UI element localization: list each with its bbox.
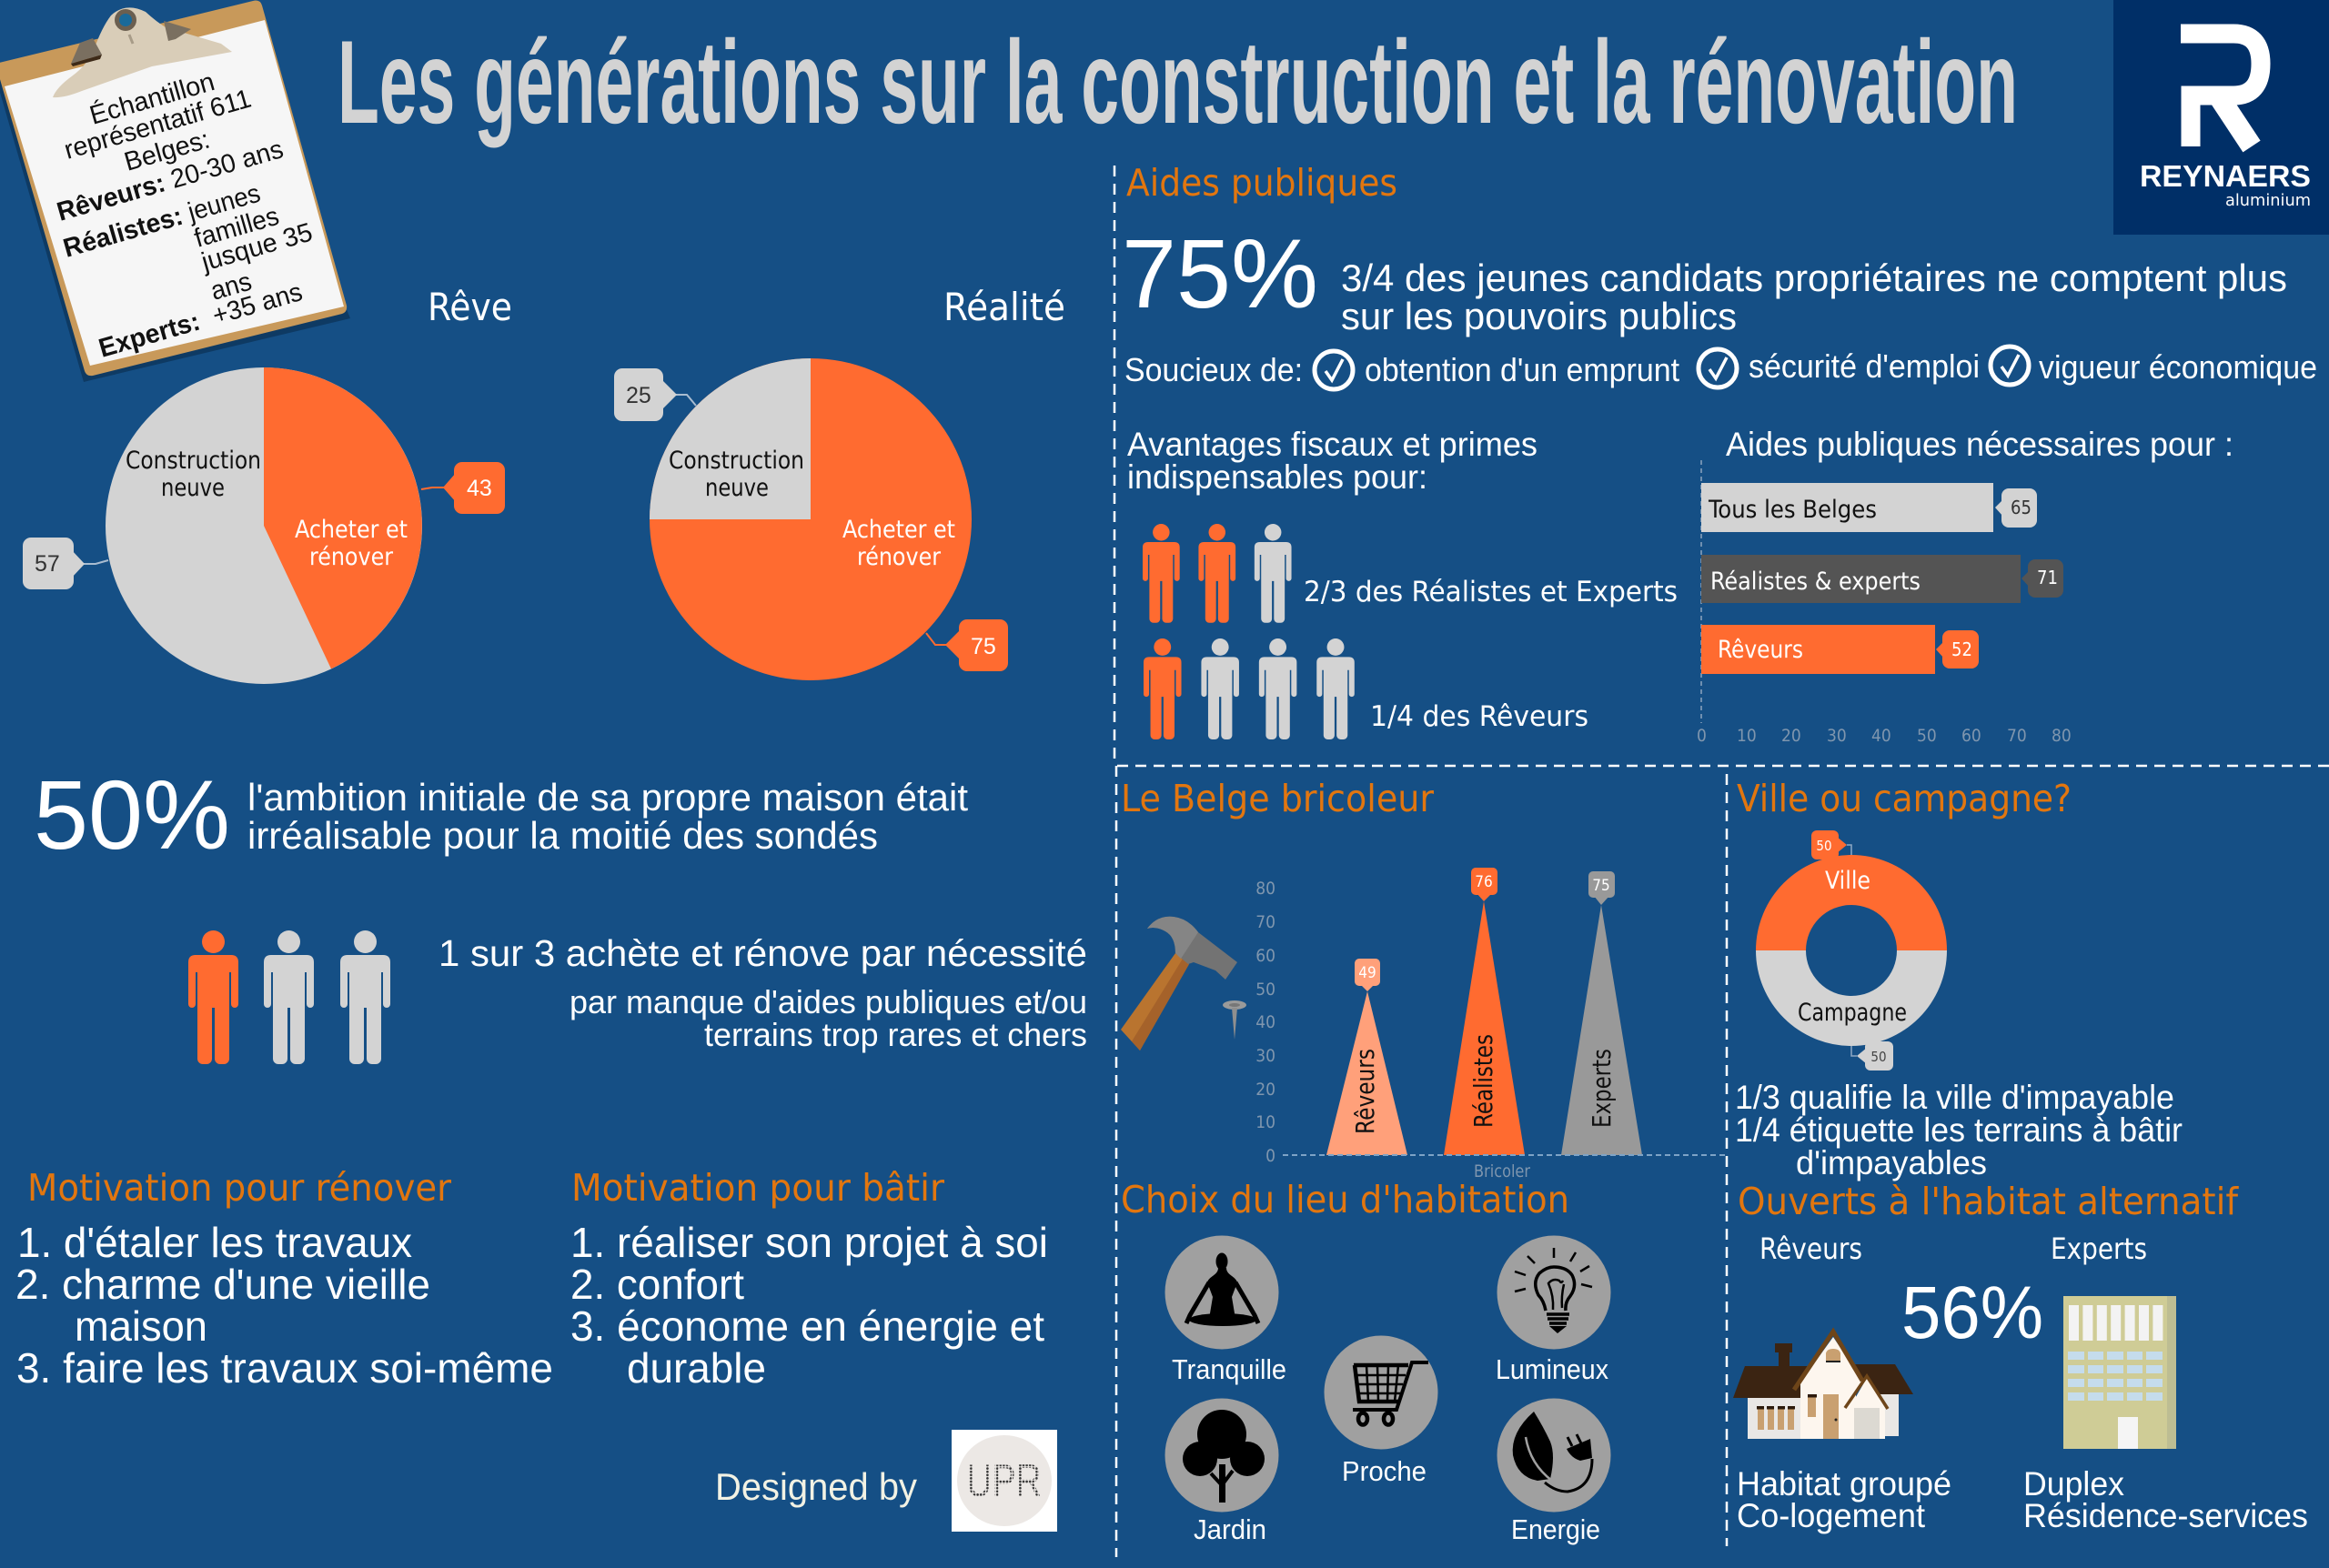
panel: Rêve pie chart: Construction (126, 447, 261, 475)
icon: Jardin (1164, 1399, 1279, 1545)
panel: Réalité pie chart: rénover (857, 543, 941, 571)
icon: Proche (1325, 1335, 1437, 1487)
icon: Tranquille (1164, 1235, 1286, 1385)
panel: motivation pour bâtir: 1. réaliser son projet à soi (570, 1219, 1048, 1266)
triangle chart: bricoler: 76 (1475, 873, 1493, 891)
panel: Réalité pie chart: Construction (669, 447, 804, 475)
logo: Reynaers aluminium: REYNAERS (2140, 159, 2311, 193)
50% statistic: l'ambition initiale de sa propre maison était (247, 776, 968, 819)
triangle chart: bricoler: 80 (1255, 879, 1275, 899)
heading: Aides publiques (1126, 161, 1397, 205)
triangle chart: bricoler: 40 (1255, 1012, 1275, 1032)
bar chart: aides publiques nécessaires: 71 (2037, 567, 2058, 588)
icon: house (1733, 1332, 1913, 1439)
panel: Réalité pie chart (614, 285, 1065, 680)
panel: Réalité pie chart: neuve (705, 474, 769, 502)
panel: Rêve pie chart: 43 (467, 476, 492, 501)
avantages fiscaux pictograms: Avantages fiscaux et primes (1127, 426, 1538, 463)
donut chart: Ville (1825, 867, 1870, 895)
ville text (1735, 1079, 2183, 1181)
bar chart: aides publiques nécessaires: 80 (2052, 726, 2072, 746)
logo: Reynaers aluminium: aluminium (2225, 191, 2311, 210)
icon: Lumineux (1496, 1235, 1610, 1385)
avantages fiscaux pictograms (1127, 426, 1678, 739)
triangle chart: bricoler: 49 (1358, 964, 1376, 982)
bar chart: aides publiques nécessaires: 0 (1697, 726, 1707, 746)
bar chart: aides publiques nécessaires: 52 (1951, 638, 1972, 660)
triangle chart: bricoler: 30 (1255, 1046, 1275, 1066)
panel: Rêve pie chart: Acheter et (295, 516, 408, 544)
panel: le Belge bricoleur: Le Belge bricoleur (1121, 777, 1435, 820)
1 sur 3 pictogram: 1 sur 3 achète et rénove par nécessité (439, 932, 1087, 974)
icon: apartment building (2063, 1296, 2176, 1449)
triangle chart: bricoler: 70 (1255, 912, 1275, 932)
panel: motivation pour bâtir: 3. économe en énergie et (570, 1302, 1044, 1350)
clipboard: sample description: Échantillon (86, 66, 217, 131)
heading: Rêve: Rêve (428, 285, 512, 329)
heading: Réalité: Réalité (943, 285, 1065, 329)
panel: aides publiques (1122, 161, 2317, 746)
panel: choix du lieu d'habitation: Choix du lieu d'habitation (1121, 1178, 1569, 1221)
clipboard: sample description: Belges: (121, 126, 213, 177)
panel: ouverts à l'habitat alternatif: Ouverts à l'habitat alternatif (1738, 1180, 2239, 1223)
bar chart: aides publiques nécessaires: 65 (2011, 497, 2032, 518)
designer credit (715, 1430, 1057, 1532)
bar chart: aides publiques nécessaires: 20 (1781, 726, 1801, 746)
donut chart (1756, 830, 1947, 1070)
panel: ouverts à l'habitat alternatif: Rêveurs (1759, 1231, 1862, 1266)
bar chart: aides publiques nécessaires: 10 (1737, 726, 1757, 746)
panel: le Belge bricoleur (1121, 777, 1727, 1181)
avantages fiscaux pictograms: indispensables pour: (1127, 458, 1427, 496)
avantages fiscaux pictograms: 2/3 des Réalistes et Experts (1304, 576, 1678, 608)
clipboard: sample description: +35 ans (209, 277, 306, 331)
triangle chart: bricoler: Bricoler (1474, 1161, 1531, 1181)
panel: Rêve pie chart (23, 285, 512, 684)
clipboard: sample description: ans (207, 267, 255, 307)
bar chart: aides publiques nécessaires: 50 (1917, 726, 1937, 746)
50% statistic (34, 759, 968, 869)
triangle chart: bricoler: 10 (1255, 1112, 1275, 1132)
triangle chart: bricoler: 60 (1255, 946, 1275, 966)
logo: Reynaers aluminium (2113, 0, 2329, 235)
triangle chart: bricoler: 0 (1265, 1146, 1275, 1166)
triangle chart: bricoler: 20 (1255, 1080, 1275, 1100)
panel: motivation pour rénover: maison (75, 1302, 207, 1350)
clipboard: sample description: Réalistes: (60, 202, 187, 264)
panel: motivation pour bâtir: Motivation pour bâtir (571, 1166, 945, 1210)
clipboard: sample description: Rêveurs: 20-30 ans (54, 135, 287, 227)
donut chart: 50 (1816, 838, 1832, 854)
habitat types text (1737, 1465, 2308, 1534)
panel: Rêve pie chart: 57 (35, 551, 60, 577)
ville text: 1/4 étiquette les terrains à bâtir (1735, 1111, 2183, 1149)
icon: Energie (1497, 1399, 1610, 1545)
panel: motivation pour bâtir: 2. confort (570, 1261, 744, 1308)
icon: hammer and nail (1121, 917, 1246, 1050)
triangle chart: bricoler: 50 (1255, 980, 1275, 1000)
donut chart: 50 (1870, 1049, 1887, 1065)
ville text: 1/3 qualifie la ville d'impayable (1735, 1079, 2174, 1116)
1 sur 3 pictogram (188, 930, 1087, 1064)
clipboard: sample description (0, 1, 350, 382)
panel: motivation pour rénover: 3. faire les travaux soi-même (16, 1344, 553, 1392)
icon: Lumineux: Lumineux (1496, 1353, 1608, 1385)
icon: Tranquille: Tranquille (1172, 1353, 1286, 1385)
triangle chart: bricoler: 75 (1592, 877, 1610, 895)
habitat types text: Habitat groupé (1737, 1465, 1951, 1503)
soucieux de checklist: Soucieux de: (1124, 351, 1303, 388)
bar chart: aides publiques nécessaires (1697, 426, 2233, 746)
icon: Jardin: Jardin (1194, 1513, 1266, 1545)
soucieux de checklist: vigueur économique (2039, 348, 2317, 386)
triangle chart: bricoler: Réalistes (1468, 1034, 1498, 1128)
panel: Rêve pie chart: neuve (161, 474, 225, 502)
bar chart: aides publiques nécessaires: Aides publiques nécessaires pour : (1726, 426, 2233, 463)
triangle chart: bricoler: Experts (1587, 1049, 1617, 1128)
habitat types text: Duplex (2023, 1465, 2124, 1503)
soucieux de checklist: obtention d'un emprunt (1365, 351, 1679, 388)
75% statistic: 75% (1122, 218, 1318, 328)
triangle chart: bricoler: Rêveurs (1350, 1049, 1380, 1134)
50% statistic: irréalisable pour la moitié des sondés (247, 814, 878, 857)
donut chart: Campagne (1798, 999, 1907, 1027)
designer credit: Designed by (715, 1465, 917, 1508)
avantages fiscaux pictograms: 1/4 des Rêveurs (1370, 700, 1588, 733)
1 sur 3 pictogram: par manque d'aides publiques et/ou (570, 983, 1087, 1020)
panel: ville ou campagne (1735, 777, 2183, 1181)
panel: motivation pour bâtir: durable (627, 1344, 766, 1392)
panel: Réalité pie chart: 75 (971, 634, 996, 659)
bar chart: aides publiques nécessaires: 70 (2007, 726, 2027, 746)
panel: ouverts à l'habitat alternatif: 56% (1901, 1271, 2043, 1354)
clipboard: sample description: Experts: (96, 307, 204, 364)
soucieux de checklist (1124, 347, 2317, 389)
designer credit: UPR (966, 1455, 1042, 1506)
panel: Réalité pie chart: 25 (626, 383, 651, 408)
bar chart: aides publiques nécessaires: Rêveurs (1718, 636, 1803, 664)
clipboard: sample description: jusque 35 (197, 218, 316, 277)
bar chart: aides publiques nécessaires: Réalistes & experts (1710, 568, 1921, 596)
panel: Rêve pie chart: rénover (309, 543, 393, 571)
50% statistic: 50% (34, 759, 230, 869)
1 sur 3 pictogram: terrains trop rares et chers (704, 1016, 1087, 1053)
75% statistic: sur les pouvoirs publics (1341, 295, 1737, 337)
clipboard: sample description: jeunes (184, 179, 264, 227)
75% statistic (1122, 218, 2287, 337)
clipboard: sample description: représentatif 611 (61, 85, 255, 166)
ville text: d'impayables (1796, 1144, 1987, 1181)
triangle chart: bricoler (1255, 868, 1727, 1181)
icon: Proche: Proche (1342, 1455, 1427, 1487)
panel: motivation pour rénover: 2. charme d'une vieille (15, 1261, 430, 1308)
habitat types text: Résidence-services (2023, 1497, 2308, 1534)
habitat types text: Co-logement (1737, 1497, 1926, 1534)
bar chart: aides publiques nécessaires: 60 (1961, 726, 1981, 746)
panel: choix du lieu d'habitation (1121, 1178, 1610, 1545)
panel: ville ou campagne: Ville ou campagne? (1737, 777, 2072, 820)
bar chart: aides publiques nécessaires: Tous les Belges (1708, 496, 1877, 524)
panel: motivation pour rénover: Motivation pour rénover (27, 1166, 452, 1210)
panel: motivation pour rénover: 1. d'étaler les travaux (17, 1219, 412, 1266)
panel: motivation pour rénover (15, 1166, 553, 1392)
bar chart: aides publiques nécessaires: 30 (1827, 726, 1847, 746)
bar chart: aides publiques nécessaires: 40 (1871, 726, 1891, 746)
75% statistic: 3/4 des jeunes candidats propriétaires ne comptent plus (1341, 256, 2287, 299)
soucieux de checklist: sécurité d'emploi (1749, 347, 1980, 385)
panel: motivation pour bâtir (570, 1166, 1048, 1392)
panel: ouverts à l'habitat alternatif (1733, 1180, 2308, 1534)
icon: Energie: Energie (1511, 1513, 1600, 1545)
panel: ouverts à l'habitat alternatif: Experts (2051, 1231, 2147, 1266)
panel: Réalité pie chart: Acheter et (842, 516, 955, 544)
clipboard: sample description: familles (191, 202, 282, 254)
